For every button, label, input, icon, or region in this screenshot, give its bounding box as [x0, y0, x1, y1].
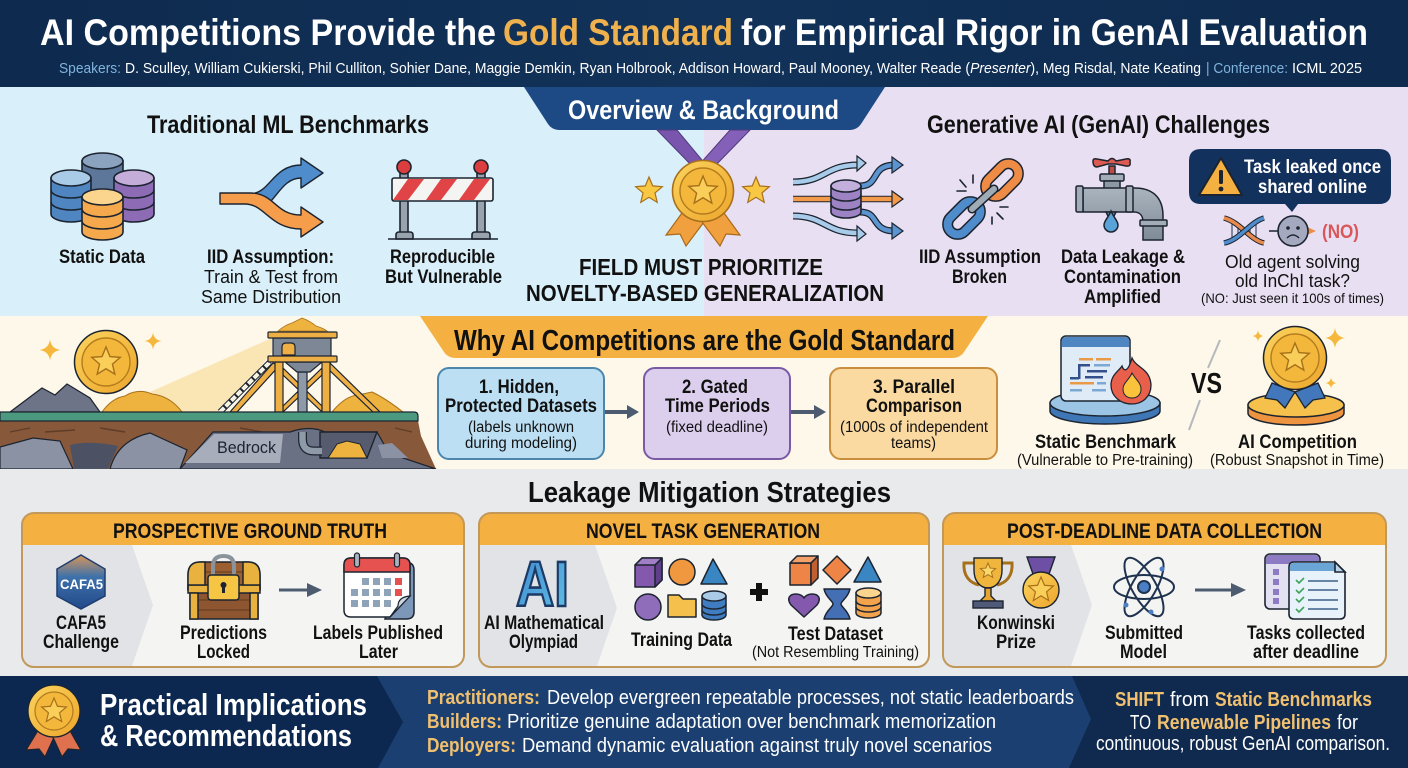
label: predictions locked: Predictions [180, 623, 267, 644]
label: data leakage and contamination: Contamination [1064, 267, 1181, 288]
icon: warning triangle [1199, 158, 1242, 195]
callout text: novelty-based generalization: NOVELTY-BASED GENERALIZATION [526, 280, 884, 306]
label: static benchmark [1017, 432, 1193, 469]
title: Gold Standard [503, 12, 733, 53]
label: reproducible but vulnerable: Reproducible [390, 247, 495, 268]
recommendations list: Deployers: [427, 735, 516, 757]
icon: data flow through cylinder [793, 156, 903, 241]
label: AI competition: AI Competition [1238, 432, 1357, 453]
icon: gold coin [40, 330, 162, 394]
card: prospective ground truth: PROSPECTIVE GROUND TRUTH [113, 520, 387, 543]
shift statement: Static Benchmarks [1215, 689, 1372, 711]
label: tasks collected after deadline [1247, 623, 1365, 663]
title: AI Competitions Provide the [40, 12, 496, 53]
label: tasks collected after deadline: after deadline [1253, 642, 1359, 663]
label: tasks collected after deadline: Tasks collected [1247, 623, 1365, 644]
callout text: Task leaked once [1244, 157, 1381, 178]
icon: task documents [1265, 554, 1345, 619]
card: hidden protected datasets: (labels unknown [468, 419, 574, 436]
label: IID assumption: Train & Test from [204, 267, 338, 287]
label: bedrock: Bedrock [217, 438, 276, 457]
icon: CAFA5 hexagon badge [57, 555, 105, 609]
icon: footer medal [26, 685, 81, 757]
icon: CAFA5 hexagon badge: CAFA5 [60, 576, 103, 592]
icon: locked treasure chest [188, 556, 260, 619]
icon: road barrier [388, 160, 498, 239]
label: static data: Static Data [59, 247, 145, 268]
label: no: (NO) [1322, 222, 1359, 243]
label: static benchmark: Static Benchmark [1035, 432, 1176, 453]
label: konwinski prize: Prize [996, 632, 1036, 653]
label: IID assumption: Same Distribution [201, 287, 341, 307]
mine pipe and gold pocket [302, 432, 377, 458]
speakers and conference line: ICML 2025 [1292, 60, 1362, 77]
label: data leakage and contamination: Data Leakage & [1061, 247, 1185, 268]
label: labels published later: Later [359, 642, 399, 663]
card: parallel comparison [830, 368, 997, 459]
card: parallel comparison: 3. Parallel [873, 377, 955, 398]
recommendations list: Practitioners: [427, 687, 540, 709]
recommendations list: Develop evergreen repeatable processes, not static leaderboards [547, 687, 1074, 709]
shift statement: from [1170, 689, 1209, 711]
versus marker [1189, 340, 1222, 430]
card: hidden protected datasets [438, 368, 604, 459]
callout text: novelty-based generalization: FIELD MUST PRIORITIZE [579, 254, 823, 280]
label: labels published later: Labels Published [313, 623, 443, 644]
footer title: & Recommendations [100, 718, 352, 753]
shift statement: for [1337, 712, 1358, 734]
icon: AI letters logo: AI [516, 548, 569, 620]
label: submitted model: Submitted [1105, 623, 1183, 644]
speakers and conference line: | Conference: [1206, 60, 1288, 77]
card: post-deadline data collection: POST-DEADLINE DATA COLLECTION [1007, 520, 1322, 543]
title [40, 12, 1368, 53]
label: reproducible but vulnerable [385, 247, 502, 288]
text: old agent question: (NO: Just seen it 100s of times) [1201, 290, 1384, 306]
card: gated time periods: (fixed deadline) [666, 419, 768, 436]
card: hidden protected datasets: 1. Hidden, [479, 377, 559, 398]
callout: task leaked once shared online [1189, 149, 1391, 212]
header band [0, 0, 1408, 87]
banner: gold standard [420, 316, 988, 358]
speakers and conference line: Speakers: [59, 60, 121, 77]
label: AI competition [1210, 432, 1384, 469]
recommendations list: Prioritize genuine adaptation over benchmark memorization [507, 711, 996, 733]
footer title: Practical Implications [100, 687, 367, 722]
arrow: model to tasks [1195, 583, 1246, 597]
footer: practical implications and recommendations [0, 676, 1408, 768]
label: static benchmark: (Vulnerable to Pre-training) [1017, 452, 1193, 469]
shift statement: Renewable Pipelines [1157, 712, 1331, 734]
text: old agent question: Old agent solving [1225, 252, 1360, 272]
arrow: locked to published [279, 583, 322, 597]
label: predictions locked: Locked [197, 642, 250, 663]
icon: training data shapes [635, 558, 727, 620]
text: old agent question: old InChI task? [1235, 271, 1350, 291]
heading: generative AI challenges: Generative AI (GenAI) Challenges [927, 111, 1270, 139]
label: konwinski prize [977, 613, 1055, 653]
label: AI mathematical olympiad [484, 613, 604, 653]
arrow: step one to two [605, 405, 639, 419]
shift statement: SHIFT [1115, 689, 1164, 711]
label: AI competition: (Robust Snapshot in Time) [1210, 452, 1384, 469]
icon: konwinski medal [1023, 557, 1059, 608]
card: gated time periods: Time Periods [665, 396, 770, 417]
banner: gold standard: Why AI Competitions are the Gold Standard [454, 325, 955, 357]
icon: static data cylinders [51, 153, 154, 240]
icon: atom submitted model [1114, 552, 1174, 622]
card: gated time periods: 2. Gated [682, 377, 748, 398]
label: IID assumption: IID Assumption: [207, 247, 334, 268]
callout text: novelty-based generalization [526, 254, 884, 306]
card: prospective ground truth [22, 513, 464, 667]
banner: overview and background: Overview & Background [568, 95, 839, 125]
label: IID assumption broken: IID Assumption [919, 247, 1041, 268]
heading: traditional ML benchmarks: Traditional ML Benchmarks [147, 111, 429, 139]
shift statement: TO [1130, 712, 1151, 734]
card: hidden protected datasets: Protected Datasets [445, 396, 597, 417]
label: IID assumption broken: Broken [952, 267, 1007, 288]
icon: sad face [1269, 216, 1316, 246]
label: AI mathematical olympiad: AI Mathematical [484, 613, 604, 634]
icon: leaking faucet [1076, 158, 1167, 240]
label: labels published later [313, 623, 443, 663]
panel: overview and background [0, 87, 1408, 316]
label: konwinski prize: Konwinski [977, 613, 1055, 634]
panel: leakage mitigation strategies [0, 469, 1408, 676]
label: test dataset: (Not Resembling Training) [752, 644, 919, 661]
label: submitted model: Model [1120, 642, 1167, 663]
card: hidden protected datasets: during modeling) [465, 435, 577, 452]
versus marker: VS [1191, 368, 1222, 400]
arrow: step two to three [791, 405, 826, 419]
label: submitted model [1105, 623, 1183, 663]
icon: plus sign [750, 583, 768, 601]
label: predictions locked [180, 623, 267, 663]
heading: leakage mitigation strategies: Leakage Mitigation Strategies [528, 477, 891, 509]
illustration: gold mine and bedrock [0, 318, 436, 469]
recommendations list: Demand dynamic evaluation against truly novel scenarios [522, 735, 992, 757]
icon: central medal with stars [636, 130, 769, 246]
icon: trophy [964, 558, 1012, 608]
label: IID assumption broken [919, 247, 1041, 288]
footer title [100, 687, 367, 753]
label: CAFA5 challenge: Challenge [43, 632, 119, 653]
speakers and conference line: D. Sculley, William Cukierski, Phil Culliton, Sohier Dane, Maggie Demkin, Ryan Holbrook, Addison Howard, Paul Mooney, Walter Reade (Presenter), Meg Risdal, Nate Keating [125, 60, 1201, 77]
label: training data: Training Data [631, 630, 732, 651]
card: parallel comparison: Comparison [866, 396, 962, 417]
card: novel task generation [479, 513, 929, 667]
label: test dataset [752, 624, 919, 661]
mine tower [220, 318, 380, 437]
label: CAFA5 challenge [43, 613, 119, 653]
icon: broken chain [943, 159, 1023, 239]
icon: calendar [344, 553, 414, 619]
label: data leakage and contamination [1061, 247, 1185, 308]
icon: AI competition medal on platform [1248, 326, 1345, 425]
recommendations list: Builders: [427, 711, 502, 733]
card: post-deadline data collection [943, 513, 1386, 667]
callout text: shared online [1258, 177, 1367, 198]
label: IID assumption [201, 247, 341, 307]
panel: why AI competitions are the gold standard [0, 316, 1408, 469]
icon: DNA helix [1224, 218, 1264, 243]
banner: overview and background [524, 87, 885, 130]
label: data leakage and contamination: Amplified [1084, 287, 1161, 308]
icon: IID split arrow [220, 158, 323, 237]
shift statement [1096, 689, 1390, 755]
recommendations list [427, 687, 1074, 757]
card: gated time periods [644, 368, 790, 459]
card: novel task generation: NOVEL TASK GENERATION [586, 520, 820, 543]
icon: test dataset shapes [789, 556, 881, 619]
callout text [1244, 157, 1381, 198]
label: reproducible but vulnerable: But Vulnerable [385, 267, 502, 288]
label: AI mathematical olympiad: Olympiad [509, 632, 578, 653]
card: parallel comparison: teams) [891, 435, 936, 452]
text: old agent question [1201, 252, 1384, 306]
card: parallel comparison: (1000s of independent [840, 419, 989, 436]
icon: static benchmark on platform with flame [1050, 336, 1160, 424]
ground layers [0, 412, 436, 469]
label: CAFA5 challenge: CAFA5 [56, 613, 106, 634]
label: test dataset: Test Dataset [788, 624, 884, 645]
